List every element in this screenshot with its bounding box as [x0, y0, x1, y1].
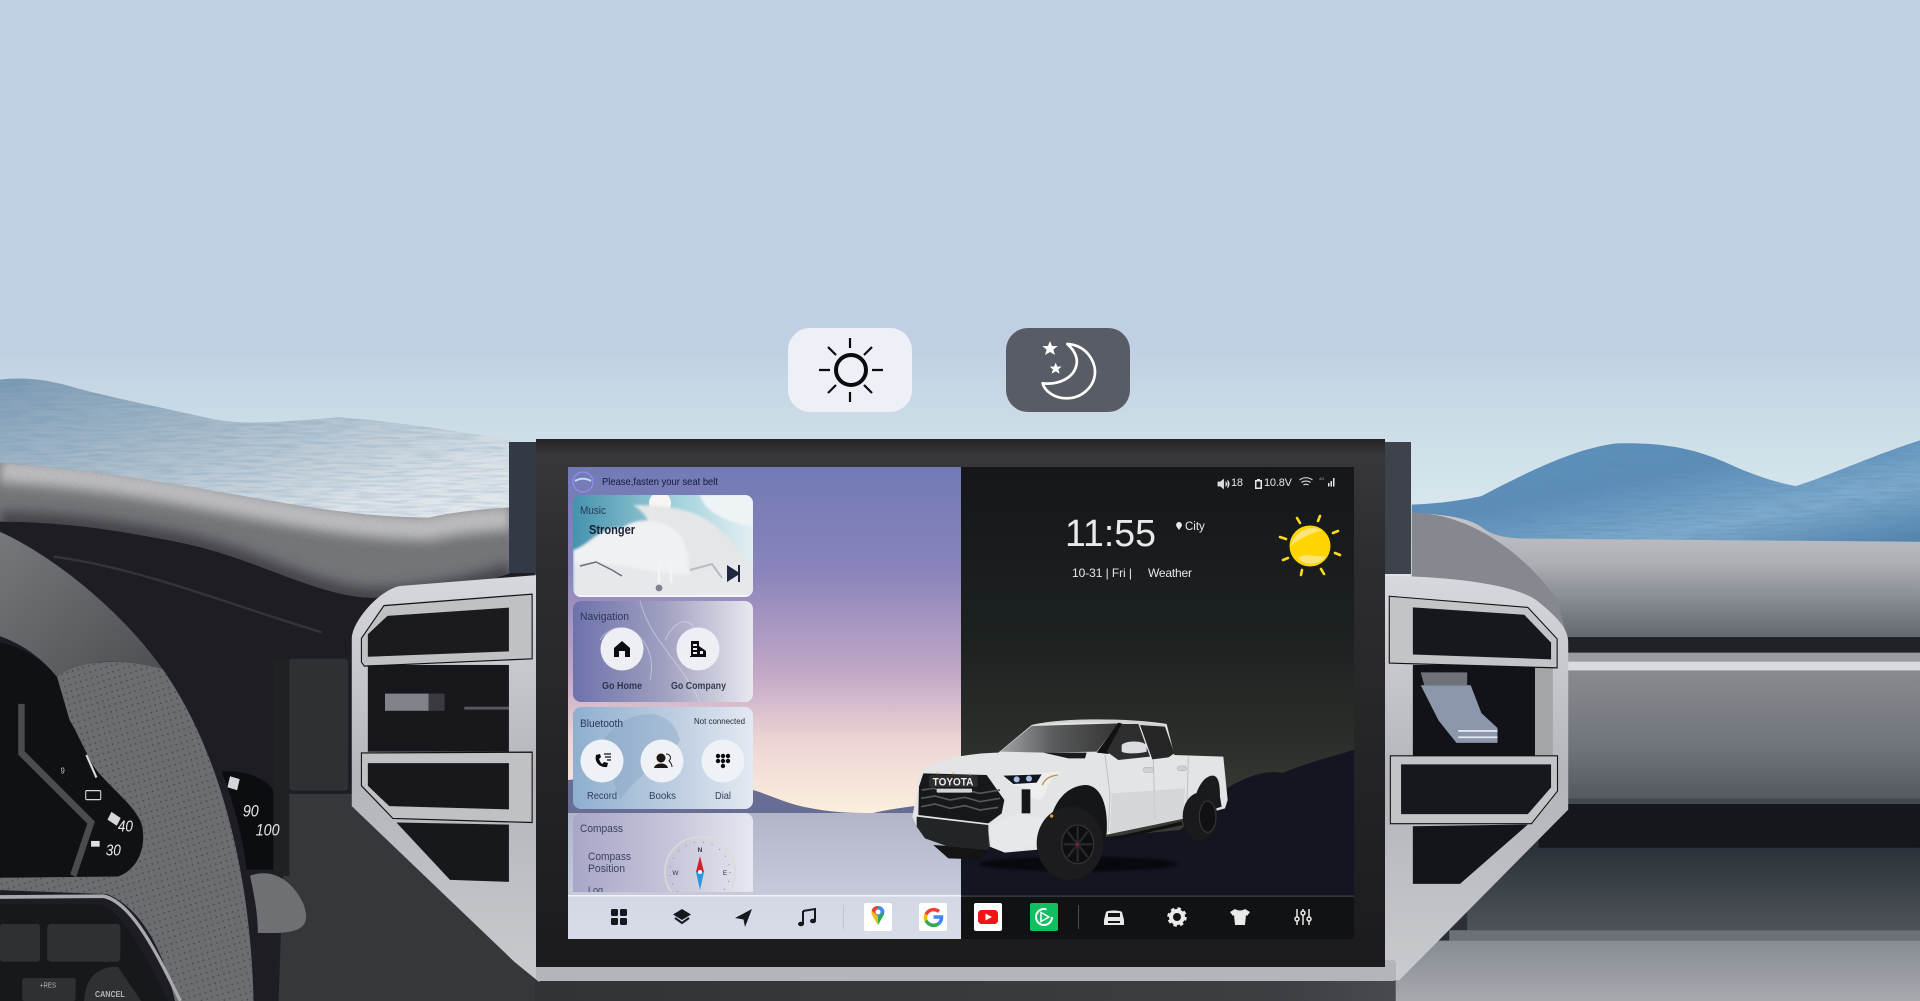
truck door lines and handles	[1105, 755, 1188, 832]
truck step bar	[1108, 822, 1182, 841]
screen left half: day mode wallpaper	[568, 467, 961, 939]
night hills	[961, 750, 1354, 896]
dock: light half	[568, 895, 961, 939]
icon tile: light mode	[788, 328, 912, 412]
right gauge: 100	[256, 822, 280, 840]
record label: Record	[587, 790, 617, 802]
instrument hood line	[54, 556, 321, 632]
status message	[573, 472, 718, 492]
books label: Books	[649, 790, 676, 802]
right dashboard surface	[1396, 513, 1920, 1001]
location: City	[1185, 521, 1205, 533]
icon: wifi	[1300, 478, 1312, 485]
left gauge: 30	[106, 842, 121, 860]
compass position label second line: Position	[588, 863, 625, 875]
right blue hills	[1412, 440, 1920, 546]
longitude label: Log	[588, 885, 603, 895]
connection status: Not connected	[694, 716, 745, 726]
panel: music card	[573, 492, 753, 597]
icon: call record	[580, 740, 624, 782]
icon: weather sun	[1280, 516, 1340, 575]
truck front wheel	[1037, 785, 1107, 880]
truck illustration	[912, 719, 1228, 880]
dock: dark half	[961, 896, 1354, 939]
side block beside cluster	[273, 659, 348, 876]
icon tile: dark mode	[1006, 328, 1130, 412]
go company label: Go Company	[671, 681, 726, 692]
wallpaper water	[568, 813, 961, 896]
background: floor tone behind head unit	[300, 950, 1920, 1001]
right air vent assembly	[1360, 576, 1568, 980]
icon: car	[1104, 910, 1124, 925]
truck bumper corner	[990, 813, 1051, 853]
steering wheel perforated spoke	[0, 662, 254, 1001]
icon: music note	[798, 909, 816, 926]
right gauge: 90	[243, 803, 259, 821]
music song name: Stronger	[589, 522, 635, 537]
dashboard top pad	[0, 458, 514, 601]
weather label: Weather	[1148, 566, 1192, 580]
steering wheel chrome arc and buttons: CANCEL	[95, 989, 125, 999]
steering wheel chrome arc and buttons	[0, 896, 180, 1001]
screen right half: night mode wallpaper	[961, 467, 1354, 896]
truck mirror	[1122, 741, 1147, 753]
compass position label: Compass	[588, 851, 631, 863]
music title: Music	[580, 505, 606, 517]
compass dial	[664, 836, 736, 892]
navigation title: Navigation	[580, 611, 629, 623]
icon: google maps tile	[864, 903, 892, 931]
left snow hill	[0, 379, 511, 532]
panel: compass card	[573, 813, 753, 892]
icon: settings gear	[1168, 908, 1186, 926]
icon: layers	[673, 909, 691, 923]
icon: equalizer sliders	[1295, 909, 1311, 925]
dial label: Dial	[715, 790, 731, 802]
status bar	[1218, 476, 1334, 489]
dock divider right	[1078, 905, 1079, 929]
battery voltage: 10.8V	[1264, 477, 1293, 489]
truck roof	[1031, 719, 1167, 727]
truck A pillar	[1097, 723, 1123, 754]
head unit bezel	[536, 439, 1385, 967]
icon: youtube tile	[974, 903, 1002, 931]
next track control	[727, 565, 740, 582]
compass dial: N	[698, 847, 703, 854]
truck ground shadow	[978, 857, 1178, 871]
location	[1176, 521, 1205, 533]
status message: Please,fasten your seat belt	[602, 476, 718, 488]
icon: google tile	[919, 903, 947, 931]
truck grille: TOYOTA	[933, 776, 974, 788]
icon: volume	[1218, 480, 1229, 488]
head unit silver lower trim	[536, 960, 1396, 981]
truck lower bumper	[917, 817, 988, 850]
truck body	[912, 720, 1228, 853]
head unit side bracket left	[509, 442, 536, 573]
icon: dial pad	[702, 740, 744, 782]
dock divider left	[843, 905, 844, 929]
left gauge: 40	[118, 819, 133, 836]
steering wheel chrome arc and buttons: +RES	[40, 982, 57, 990]
right gauge	[221, 771, 280, 870]
panel: navigation card	[573, 601, 753, 702]
icon: battery	[1255, 479, 1262, 489]
truck rear wheel	[1183, 776, 1222, 841]
truck side windows	[1107, 724, 1174, 760]
compass title: Compass	[580, 823, 623, 835]
icon: navigation arrow	[735, 909, 752, 927]
dark area under dashboard	[0, 520, 536, 1001]
wallpaper hills	[568, 778, 961, 830]
dock icons	[611, 903, 1311, 931]
bluetooth title: Bluetooth	[580, 718, 623, 730]
left dashboard, steering wheel and vent	[0, 379, 539, 1001]
head unit side bracket right	[1385, 442, 1411, 574]
scene: car dashboard with head unit	[0, 328, 1920, 1001]
steering wheel rim	[0, 532, 162, 677]
compass dial: W	[672, 870, 679, 877]
pause control	[658, 572, 672, 583]
wiper stalk	[250, 873, 306, 933]
right dashboard and vent	[1360, 440, 1920, 1001]
icon: apps grid	[611, 909, 627, 925]
left gauge: 9	[61, 766, 65, 776]
truck grille	[918, 772, 1004, 823]
truck side shading	[1110, 788, 1185, 833]
lower dash surface	[279, 794, 536, 1001]
truck windshield	[1000, 723, 1118, 753]
left gauge	[0, 642, 150, 880]
date: 10-31 | Fri |	[1072, 566, 1132, 580]
truck far wheel	[933, 845, 988, 859]
icon: home	[600, 628, 644, 670]
volume value: 18	[1231, 477, 1243, 489]
go home label: Go Home	[602, 681, 642, 692]
clock: 11:55	[1065, 513, 1156, 555]
left air vent assembly	[352, 575, 539, 982]
icon: contact books	[640, 740, 684, 782]
truck headlight	[1003, 772, 1062, 813]
icon: carplay tile	[1030, 903, 1058, 931]
icon: company	[676, 628, 720, 670]
signal strength: 4G	[1319, 476, 1324, 481]
progress marker	[656, 585, 662, 591]
compass dial: E	[723, 870, 728, 877]
truck cowl	[1043, 753, 1087, 758]
icon: shirt theme	[1230, 909, 1250, 925]
panel: bluetooth card	[573, 707, 753, 809]
